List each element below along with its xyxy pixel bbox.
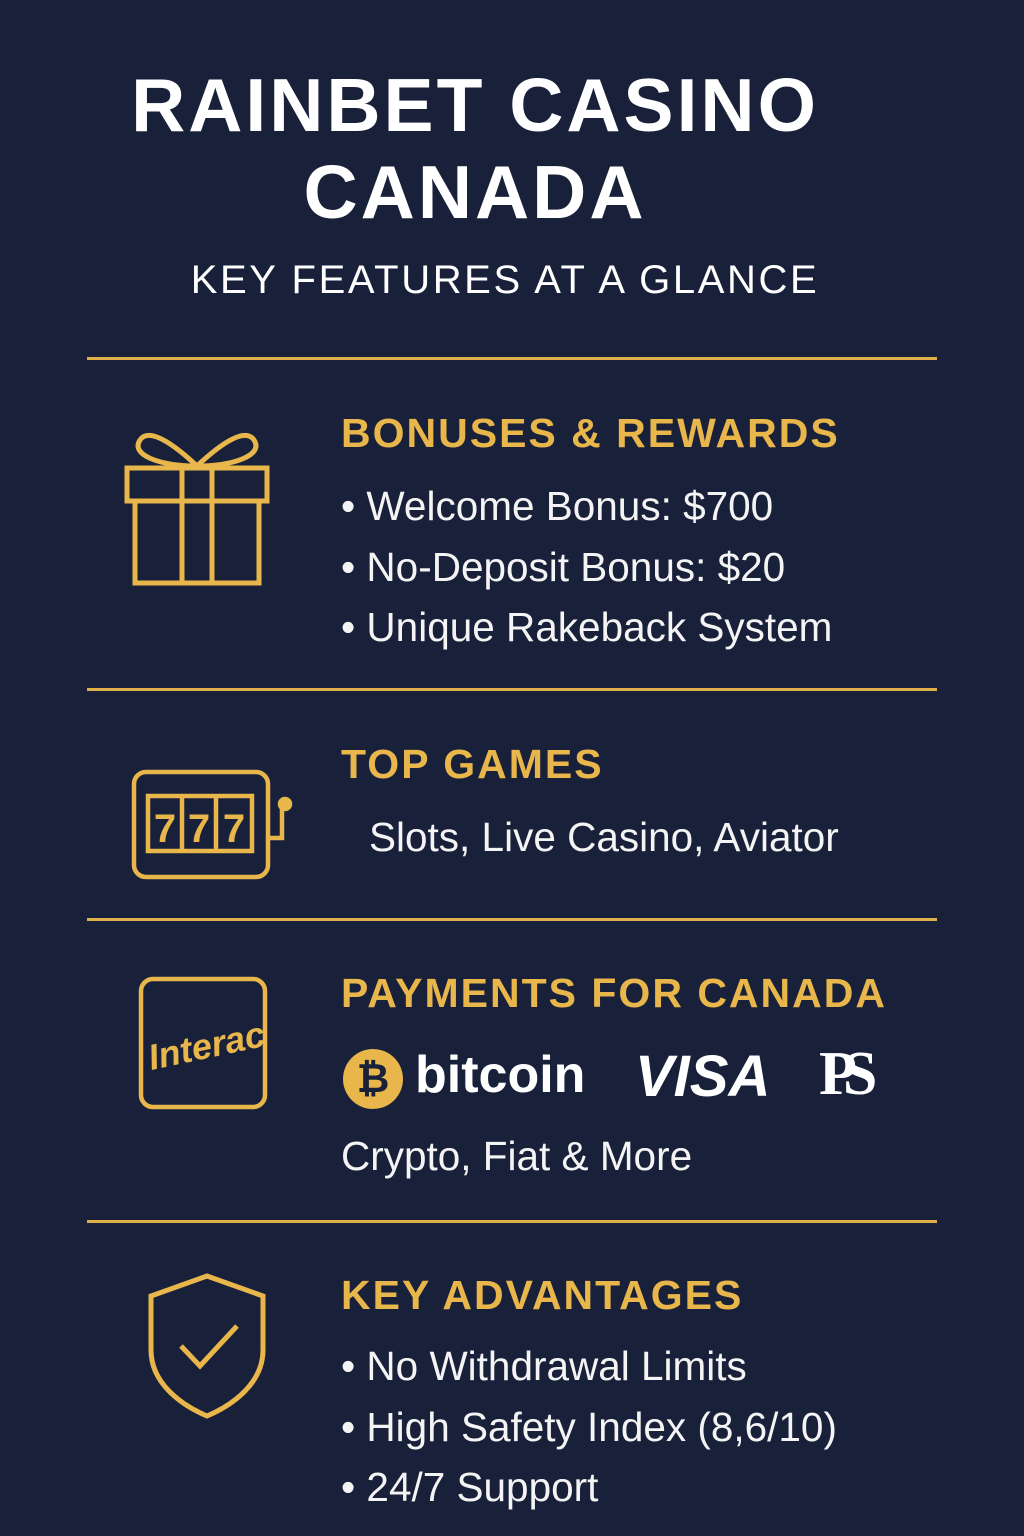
icon: shield (148, 1273, 266, 1419)
icon: slot machine: 7 (154, 807, 176, 851)
bonuses list (341, 483, 832, 650)
icon: bitcoin (343, 1049, 403, 1109)
icon: interac (138, 976, 268, 1110)
advantages list: • High Safety Index (8,6/10) (341, 1404, 837, 1450)
bonuses list: • Unique Rakeback System (341, 604, 832, 650)
visa: VISA (635, 1044, 770, 1109)
heading: bonuses: BONUSES & REWARDS (341, 410, 840, 456)
payments text: Crypto, Fiat & More (341, 1133, 692, 1179)
subtitle: KEY FEATURES AT A GLANCE (191, 258, 819, 302)
advantages list (341, 1343, 837, 1510)
advantages list: • 24/7 Support (341, 1464, 598, 1510)
payment logos (343, 1040, 875, 1109)
title: CANADA (304, 150, 646, 234)
PS logo: PS (819, 1040, 863, 1108)
bonuses list: • No-Deposit Bonus: $20 (341, 544, 785, 590)
games text: Slots, Live Casino, Aviator (369, 814, 839, 860)
title (131, 63, 819, 234)
title: RAINBET CASINO (131, 63, 819, 147)
heading: advantages: KEY ADVANTAGES (341, 1272, 743, 1318)
icon: interac: Interac (144, 1013, 268, 1078)
heading: top games: TOP GAMES (341, 741, 604, 787)
icon: slot machine: 7 (188, 807, 210, 851)
icon: gift (124, 432, 270, 586)
icon: slot machine: 7 (223, 807, 245, 851)
heading: payments: PAYMENTS FOR CANADA (341, 970, 887, 1016)
icon: bitcoin: ₿ (357, 1057, 389, 1101)
icon: slot machine (132, 770, 292, 880)
bonuses list: • Welcome Bonus: $700 (341, 483, 773, 529)
advantages list: • No Withdrawal Limits (341, 1343, 747, 1389)
bitcoin text: bitcoin (415, 1046, 585, 1104)
